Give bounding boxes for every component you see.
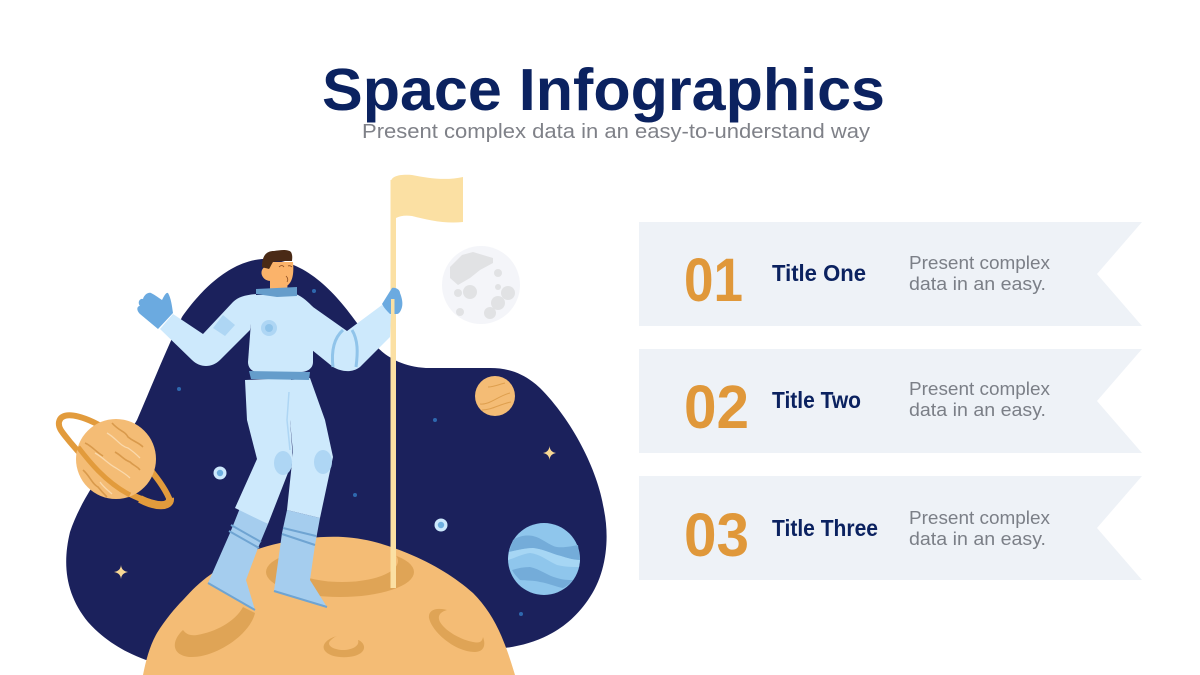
small orange planet (475, 376, 515, 416)
neck (270, 280, 288, 291)
illustration: astronaut on a moon (59, 175, 607, 675)
description: Present complex (909, 252, 1051, 273)
right leg (287, 378, 333, 518)
face details (279, 266, 292, 282)
face (261, 262, 293, 287)
chest badge (261, 320, 277, 336)
heading: Title One: Title One (772, 260, 866, 286)
dark blue space blob (66, 259, 607, 660)
number 03: 03 (684, 501, 749, 569)
title: Space Infographics (322, 57, 885, 123)
belt (249, 371, 310, 380)
bottom crater (324, 636, 364, 657)
panel: item one (639, 222, 1142, 326)
ribbon background (639, 349, 1142, 453)
heading: Title Two: Title Two (772, 387, 861, 413)
astronaut (137, 250, 402, 610)
boot back leg (274, 510, 327, 607)
left arm (160, 294, 256, 366)
torso (248, 295, 313, 372)
icon: star left (114, 565, 128, 579)
grey moon (442, 246, 520, 324)
knee patches (274, 451, 292, 475)
ribbon background (639, 222, 1142, 326)
trouser seam (287, 392, 290, 450)
moon surface (143, 537, 515, 675)
icon: star right (543, 446, 556, 460)
flag (390, 175, 463, 588)
flag pole in hand (391, 299, 394, 317)
right arm (296, 294, 391, 371)
number 01: 01 (684, 246, 743, 314)
boot stripes and soles (208, 525, 327, 610)
left crater (175, 607, 255, 657)
collar (256, 287, 297, 297)
description: Present complex (909, 507, 1051, 528)
arm patch (213, 315, 235, 336)
description: Present complex (909, 378, 1051, 399)
left leg (235, 378, 293, 524)
subtitle: Present complex data in an easy-to-understand way (362, 120, 871, 143)
description: data in an easy. (909, 273, 1046, 294)
boot front leg (208, 508, 268, 610)
arm bands (332, 330, 357, 367)
small blue dots (177, 289, 523, 616)
right crater (429, 609, 484, 652)
large crater with flag base (266, 547, 414, 597)
blue striped planet (508, 523, 580, 595)
panel: item three (639, 476, 1142, 580)
panel: item two (639, 349, 1142, 453)
ribbon background (639, 476, 1142, 580)
ringed planet (59, 415, 170, 505)
description: data in an easy. (909, 399, 1046, 420)
right glove (382, 288, 402, 314)
number 02: 02 (684, 373, 749, 441)
description: data in an easy. (909, 528, 1046, 549)
hair (262, 250, 292, 269)
heading: Title Three: Title Three (772, 515, 878, 541)
left glove (137, 293, 173, 329)
ringed dots (214, 466, 448, 532)
